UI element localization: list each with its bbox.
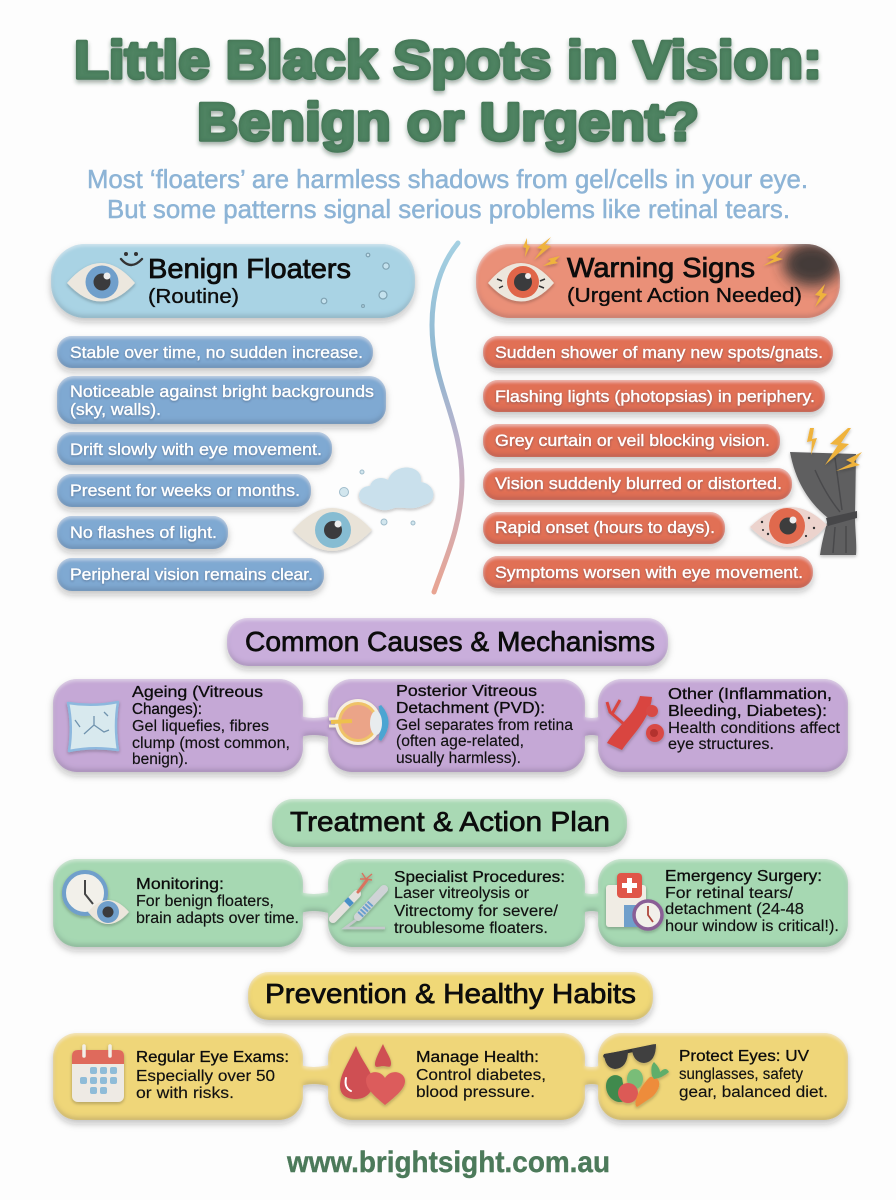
icon: sunglasses and vegetables	[604, 1044, 669, 1107]
icon: eye cross-section	[329, 699, 387, 745]
benign list: Peripheral vision remains clear.	[70, 565, 313, 584]
benign list: (sky, walls).	[70, 400, 161, 419]
icon: laser tools	[333, 873, 385, 928]
benign list: Stable over time, no sudden increase.	[70, 343, 363, 362]
prevention cards	[53, 1033, 848, 1120]
causes card 3 text	[668, 686, 841, 753]
warning list: Symptoms worsen with eye movement.	[495, 563, 803, 582]
causes card 1 text: clump (most common,	[132, 735, 290, 752]
prevention card 3 text: sunglasses, safety	[679, 1066, 803, 1083]
icon: blood drops and heart	[340, 1044, 405, 1105]
prevention card 2 text: Manage Health:	[416, 1049, 539, 1066]
panel: warning signs	[476, 237, 862, 588]
warning list	[483, 336, 833, 588]
warning list: Grey curtain or veil blocking vision.	[495, 431, 770, 450]
icon: blood vessel	[607, 696, 664, 750]
treatment card 3 text: hour window is critical!).	[665, 918, 839, 935]
treatment card 2 text: Specialist Procedures:	[394, 869, 565, 886]
warning list: Sudden shower of many new spots/gnats.	[495, 343, 823, 362]
benign header pill	[51, 244, 415, 318]
icon: calm eye	[67, 263, 135, 302]
icon: hospital and clock	[606, 873, 662, 929]
treatment heading pill	[272, 799, 627, 847]
subtitle	[87, 164, 808, 224]
treatment card 3 text: detachment (24-48	[665, 901, 804, 918]
benign list: No flashes of light.	[70, 523, 217, 542]
treatment cards	[53, 859, 848, 947]
benign heading: (Routine)	[148, 286, 239, 308]
benign list	[57, 336, 386, 591]
warning heading: Warning Signs	[567, 252, 755, 283]
causes card 2 text: usually harmless).	[396, 750, 521, 767]
treatment card 2 text: Vitrectomy for severe/	[394, 903, 559, 920]
title: Benign or Urgent?	[197, 93, 699, 152]
icon: droplets	[321, 253, 389, 307]
icon: curtain and red eye	[750, 428, 862, 555]
causes card 1 text	[132, 684, 290, 768]
icon: calendar	[72, 1046, 124, 1102]
benign heading	[148, 253, 351, 308]
prevention card 2 text: blood pressure.	[416, 1084, 535, 1101]
causes card 2 text: Posterior Vitreous	[396, 683, 537, 700]
benign heading: Benign Floaters	[148, 253, 351, 284]
treatment card 1 text: Monitoring:	[136, 876, 224, 893]
panel: treatment and action plan	[53, 799, 848, 947]
prevention card 3 text: gear, balanced diet.	[679, 1084, 828, 1101]
icon: lightning bolts	[523, 237, 827, 307]
subtitle: But some patterns signal serious problems like retinal tears.	[107, 194, 790, 224]
causes card 2 text: (often age-related,	[396, 733, 524, 750]
prevention heading pill: Prevention & Healthy Habits	[265, 978, 636, 1009]
causes card 1 text: Gel liquefies, fibres	[132, 718, 269, 735]
title: Little Black Spots in Vision:	[74, 31, 822, 90]
prevention card 3 text	[679, 1048, 828, 1101]
treatment card 2 text: Laser vitreolysis or	[394, 885, 529, 902]
treatment card 2 text	[394, 869, 565, 937]
icon: smile	[121, 252, 142, 265]
causes card 3 text: Bleeding, Diabetes):	[668, 703, 827, 720]
panel: prevention and healthy habits	[53, 972, 848, 1120]
treatment card 1 text	[136, 876, 299, 927]
footer url: www.brightsight.com.au	[286, 1146, 610, 1179]
prevention card 1 text: Especially over 50	[136, 1068, 275, 1085]
subtitle: Most ‘floaters’ are harmless shadows from gel/cells in your eye.	[87, 164, 808, 194]
icon: clock and eye	[64, 872, 129, 924]
warning heading	[567, 252, 802, 307]
panel: benign floaters	[51, 244, 433, 591]
treatment card 2 text: troublesome floaters.	[394, 920, 548, 937]
causes card 1 text: benign).	[132, 751, 188, 768]
causes heading pill: Common Causes & Mechanisms	[245, 626, 655, 657]
causes card 3 text: eye structures.	[668, 736, 774, 753]
causes card 3 text: Other (Inflammation,	[668, 686, 832, 703]
prevention card 2 text: Control diabetes,	[416, 1067, 546, 1084]
benign list: Present for weeks or months.	[70, 481, 300, 500]
dark smudge	[783, 242, 841, 286]
prevention card 1 text	[136, 1049, 289, 1102]
icon: eye with cloud	[293, 467, 433, 551]
causes card 2 text: Detachment (PVD):	[396, 700, 545, 717]
icon: alarmed eye	[488, 263, 554, 302]
treatment card 3 text: Emergency Surgery:	[665, 868, 822, 885]
prevention card 2 text	[416, 1049, 546, 1101]
warning list: Flashing lights (photopsias) in periphery.	[495, 387, 815, 406]
warning list: Vision suddenly blurred or distorted.	[495, 474, 782, 493]
benign list: Drift slowly with eye movement.	[70, 440, 322, 459]
benign list: Noticeable against bright backgrounds	[70, 382, 374, 401]
treatment card 3 text: For retinal tears/	[665, 885, 794, 902]
icon: vitreous gel	[68, 702, 118, 751]
causes card 3 text: Health conditions affect	[668, 720, 841, 737]
divider curve	[432, 243, 462, 592]
causes heading pill	[227, 618, 668, 666]
treatment card 1 text: For benign floaters,	[136, 893, 274, 910]
treatment card 1 text: brain adapts over time.	[136, 910, 299, 927]
prevention heading pill	[248, 972, 653, 1020]
title	[74, 31, 822, 152]
prevention card 3 text: Protect Eyes: UV	[679, 1048, 809, 1065]
treatment heading pill: Treatment & Action Plan	[290, 806, 610, 837]
panel: common causes and mechanisms	[53, 618, 848, 772]
treatment card 3 text	[665, 868, 839, 935]
warning heading: (Urgent Action Needed)	[567, 285, 802, 307]
causes cards	[53, 679, 848, 772]
prevention card 1 text: or with risks.	[136, 1085, 234, 1102]
warning header pill	[476, 244, 840, 318]
causes card 1 text: Ageing (Vitreous	[132, 684, 263, 701]
causes card 1 text: Changes):	[132, 701, 202, 718]
prevention card 1 text: Regular Eye Exams:	[136, 1049, 289, 1066]
causes card 2 text	[396, 683, 573, 767]
warning list: Rapid onset (hours to days).	[495, 518, 715, 537]
causes card 2 text: Gel separates from retina	[396, 717, 573, 734]
